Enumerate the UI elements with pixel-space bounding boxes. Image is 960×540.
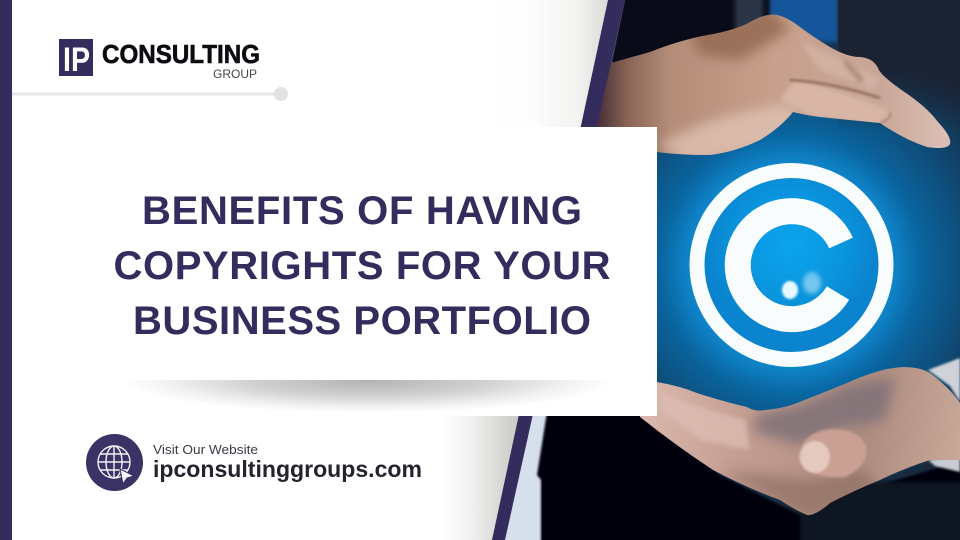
thumb xyxy=(798,429,867,477)
title: COPYRIGHTS FOR YOUR xyxy=(114,244,611,288)
left navy strip xyxy=(0,0,12,540)
diagonal navy band xyxy=(492,0,625,540)
logo divider line with dot xyxy=(12,87,288,101)
icon: globe with cursor xyxy=(86,434,143,491)
photo: lower hand xyxy=(640,356,960,516)
logo: CONSULTING xyxy=(102,39,260,69)
title: BENEFITS OF HAVING xyxy=(142,189,582,233)
shirt cuff xyxy=(928,358,960,472)
title card xyxy=(12,127,657,416)
photo: dark suit background xyxy=(505,0,960,540)
title: BUSINESS PORTFOLIO xyxy=(133,299,591,343)
card drop shadow xyxy=(123,380,613,414)
logo xyxy=(59,39,260,81)
website call to action xyxy=(153,443,422,482)
photo: upper hand xyxy=(596,14,950,155)
title xyxy=(114,189,611,343)
website call to action: ipconsultinggroups.com xyxy=(153,456,422,482)
website call to action: Visit Our Website xyxy=(153,443,258,457)
grey shading beside the diagonal band xyxy=(440,0,609,540)
icon: copyright symbol xyxy=(679,153,903,377)
logo: GROUP xyxy=(213,67,257,81)
logo: IP xyxy=(63,41,90,79)
photo: blue glow behind the symbol xyxy=(506,0,960,540)
